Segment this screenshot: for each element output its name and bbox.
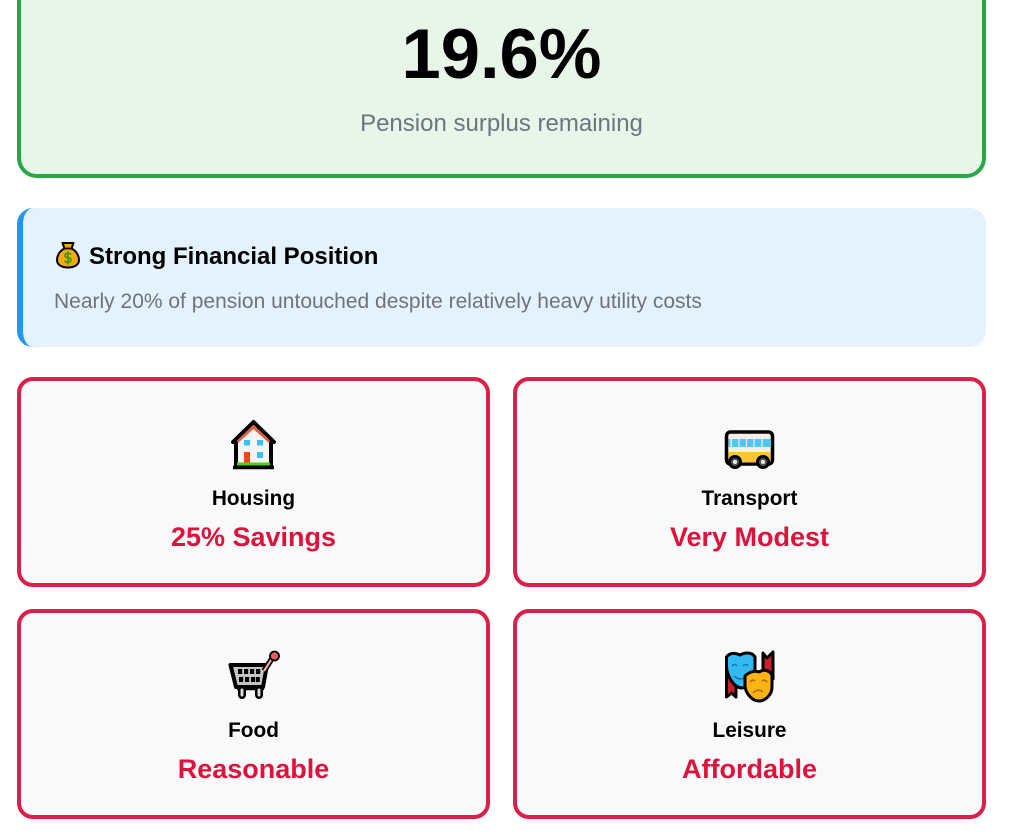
hero caption: Pension surplus remaining xyxy=(360,110,643,137)
callout heading: Strong Financial Position xyxy=(89,243,378,270)
panel: financial position callout xyxy=(17,208,986,347)
card: transport xyxy=(513,377,986,587)
card value: 25% Savings xyxy=(171,522,336,552)
card value: Affordable xyxy=(682,754,817,784)
card label: Housing xyxy=(212,487,295,510)
card value: Very Modest xyxy=(670,522,829,552)
big number: 19.6% xyxy=(402,14,601,93)
panel: pension surplus hero xyxy=(17,0,986,178)
icon: money bag xyxy=(56,242,80,268)
card label: Transport xyxy=(702,487,797,510)
card: food xyxy=(17,609,490,819)
icon: theater masks xyxy=(725,650,774,702)
callout text: Nearly 20% of pension untouched despite relatively heavy utility costs xyxy=(54,290,702,313)
icon: shopping cart xyxy=(228,650,280,699)
card: leisure xyxy=(513,609,986,819)
icon: house xyxy=(231,420,276,470)
card: housing xyxy=(17,377,490,587)
card label: Food xyxy=(228,719,279,742)
card value: Reasonable xyxy=(178,754,329,784)
icon: bus xyxy=(724,430,774,469)
card label: Leisure xyxy=(712,719,786,742)
